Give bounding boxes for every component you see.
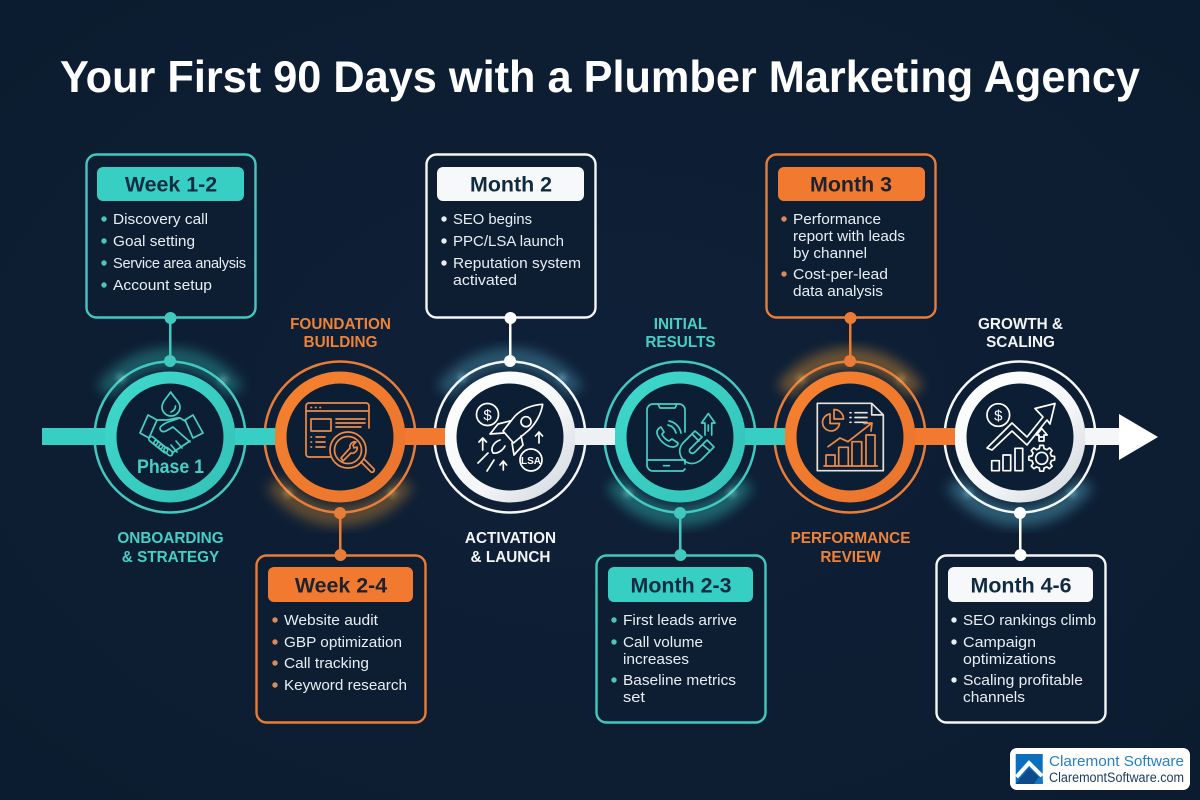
timeline bar bbox=[42, 428, 1120, 445]
checklist: month 4-6: SEO rankings climb bbox=[963, 613, 1096, 629]
icon: growth chart and gear bbox=[987, 404, 1055, 471]
stage label: performance review: PERFORMANCE bbox=[791, 530, 910, 547]
stage label: foundation building: BUILDING bbox=[304, 334, 377, 351]
node 1: onboarding and strategy bbox=[94, 355, 246, 512]
node 6: growth and scaling bbox=[944, 362, 1096, 519]
panel: month 2-3 bbox=[596, 549, 766, 722]
checklist: month 3: data analysis bbox=[793, 284, 883, 300]
stage label: growth and scaling: GROWTH & bbox=[978, 316, 1063, 333]
stage label: foundation building: FOUNDATION bbox=[290, 316, 391, 333]
checklist: month 2: PPC/LSA launch bbox=[453, 234, 564, 250]
panel: month 4-6 bbox=[936, 549, 1106, 722]
checklist: month 3 bbox=[781, 212, 905, 300]
checklist: month 2-3 bbox=[611, 613, 737, 706]
logo badge: claremont software bbox=[1010, 748, 1190, 790]
checklist: month 2: Reputation system bbox=[453, 256, 581, 272]
icon: rocket launch bbox=[476, 404, 543, 471]
stage label: onboarding and strategy: & STRATEGY bbox=[122, 549, 219, 566]
icon: rocket launch: LSA bbox=[521, 456, 541, 467]
stage label: growth and scaling: SCALING bbox=[986, 334, 1055, 351]
arrow head bbox=[1119, 414, 1158, 460]
heading: month 2-3 bbox=[608, 567, 753, 602]
panel: month 2 bbox=[426, 154, 596, 324]
panel: week 2-4 bbox=[256, 549, 426, 722]
heading: month 4-6 bbox=[948, 567, 1093, 602]
icon: website audit bbox=[306, 403, 374, 472]
icon: handshake and water drop bbox=[140, 392, 203, 457]
stage label: initial results: RESULTS bbox=[645, 334, 716, 351]
checklist: week 2-4: Keyword research bbox=[284, 678, 407, 694]
title: Your First 90 Days with a Plumber Marketing Agency bbox=[60, 53, 1140, 102]
heading: month 2-3: Month 2-3 bbox=[630, 574, 732, 598]
checklist: month 2: activated bbox=[453, 273, 517, 289]
checklist: month 2 bbox=[441, 212, 581, 289]
heading: month 4-6: Month 4-6 bbox=[970, 574, 1072, 598]
icon: rocket launch: $ bbox=[483, 407, 492, 424]
stage label: activation and launch: ACTIVATION bbox=[465, 530, 556, 547]
checklist: month 2-3: Call volume bbox=[623, 635, 703, 651]
checklist: month 3: Performance bbox=[793, 212, 881, 228]
panel: week 1-2 bbox=[86, 154, 256, 324]
stage label: onboarding and strategy: ONBOARDING bbox=[117, 530, 224, 547]
checklist: month 4-6: channels bbox=[963, 690, 1025, 706]
icon: performance report bbox=[817, 403, 883, 471]
heading: month 2 bbox=[437, 167, 584, 201]
icon: phone and magnet bbox=[647, 404, 715, 471]
checklist: month 2-3: First leads arrive bbox=[623, 613, 737, 629]
checklist: month 2-3: increases bbox=[623, 652, 689, 668]
heading: week 2-4: Week 2-4 bbox=[295, 574, 387, 598]
checklist: week 2-4 bbox=[272, 613, 407, 694]
heading: week 2-4 bbox=[268, 567, 413, 602]
node 5: performance review bbox=[774, 355, 926, 512]
checklist: week 1-2: Discovery call bbox=[113, 212, 208, 228]
checklist: week 1-2 bbox=[101, 212, 246, 294]
icon: growth chart and gear: $ bbox=[994, 408, 1003, 424]
heading: week 1-2 bbox=[97, 167, 244, 201]
checklist: month 2-3: Baseline metrics bbox=[623, 673, 736, 689]
checklist: month 4-6: Scaling profitable bbox=[963, 673, 1083, 689]
stage label: activation and launch: & LAUNCH bbox=[471, 549, 550, 566]
checklist: week 1-2: Service area analysis bbox=[113, 256, 246, 272]
checklist: week 1-2: Goal setting bbox=[113, 234, 195, 250]
checklist: week 1-2: Account setup bbox=[113, 278, 212, 294]
panel: month 3 bbox=[766, 154, 936, 324]
heading: month 3: Month 3 bbox=[810, 172, 892, 196]
checklist: month 3: Cost-per-lead bbox=[793, 267, 888, 283]
checklist: month 3: by channel bbox=[793, 246, 867, 262]
stage label: performance review: REVIEW bbox=[820, 549, 881, 566]
logo badge: claremont software: ClaremontSoftware.com bbox=[1049, 770, 1184, 785]
icon: claremont logo bbox=[1016, 754, 1043, 784]
checklist: month 4-6: Campaign bbox=[963, 635, 1036, 651]
checklist: month 2-3: set bbox=[623, 690, 645, 706]
phase label: Phase 1 bbox=[137, 457, 204, 478]
checklist: month 4-6 bbox=[951, 613, 1096, 706]
connector lines bbox=[169, 318, 1022, 555]
checklist: month 4-6: optimizations bbox=[963, 652, 1056, 668]
heading: month 2: Month 2 bbox=[470, 172, 552, 196]
checklist: month 2: SEO begins bbox=[453, 212, 532, 228]
checklist: week 2-4: GBP optimization bbox=[284, 635, 402, 651]
node 4: initial results bbox=[604, 362, 756, 519]
checklist: month 3: report with leads bbox=[793, 229, 905, 245]
checklist: week 2-4: Website audit bbox=[284, 613, 378, 629]
checklist: week 2-4: Call tracking bbox=[284, 656, 369, 672]
heading: month 3 bbox=[778, 167, 925, 201]
logo badge: claremont software: Claremont Software bbox=[1049, 753, 1184, 770]
heading: week 1-2: Week 1-2 bbox=[125, 172, 217, 196]
node 2: foundation building bbox=[264, 362, 416, 519]
node 3: activation and launch bbox=[434, 355, 586, 512]
stage label: initial results: INITIAL bbox=[654, 316, 707, 333]
